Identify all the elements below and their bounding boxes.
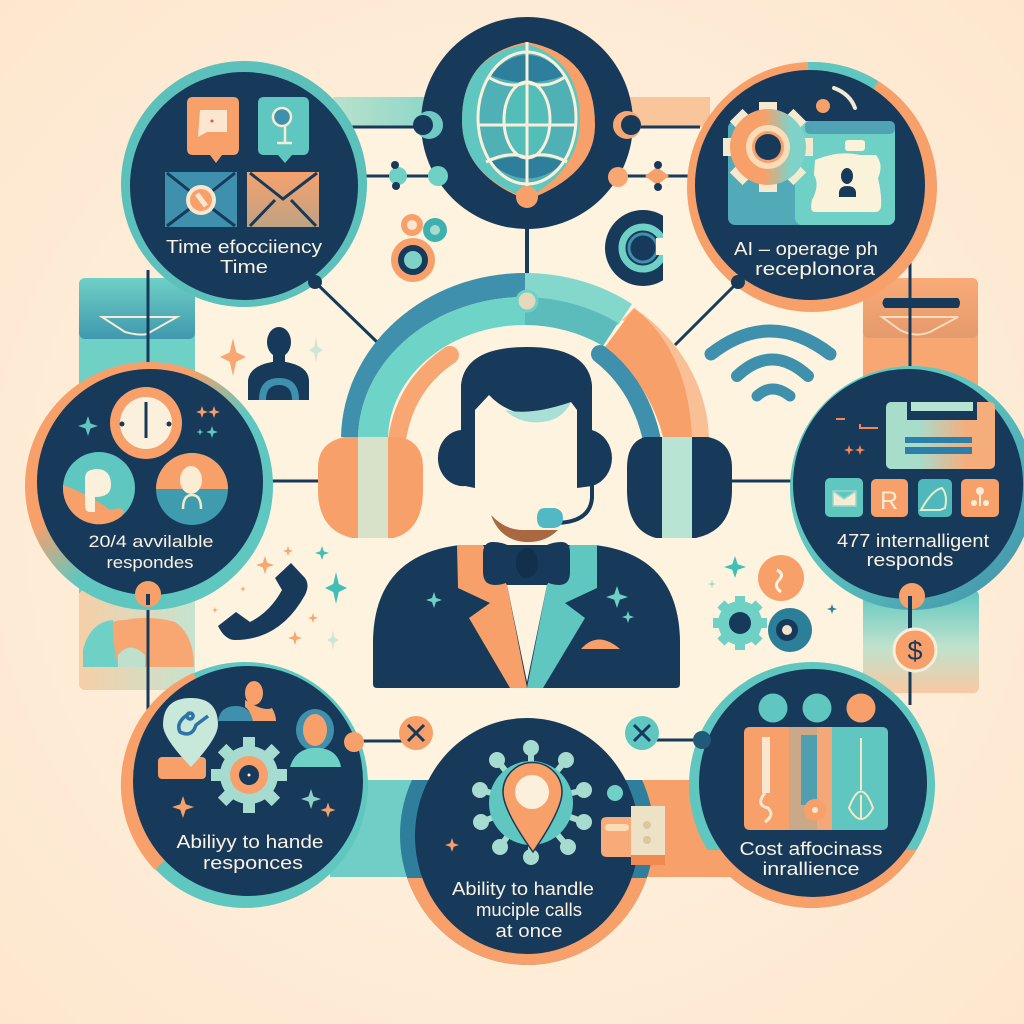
icon: hand holding card: [601, 806, 665, 865]
microphone: [537, 484, 592, 528]
label: intelligent responses: [837, 531, 989, 570]
label: multiple calls: at once: [496, 921, 562, 941]
connector node: AI circle: [731, 275, 745, 289]
label: multiple calls: Ability to handle: [452, 879, 594, 899]
icon: cross left: [399, 716, 433, 750]
icon: person silhouette: [220, 327, 323, 400]
icon: cross right: [625, 716, 659, 750]
shirt: [507, 585, 547, 682]
teal lapel: [527, 545, 597, 688]
node: [693, 731, 711, 749]
label: handle responses: responces: [203, 853, 303, 873]
icon: orange chat bubble: [187, 97, 239, 163]
label: time efficiency: [166, 237, 322, 277]
icon: gear ring with location pin: [472, 740, 623, 865]
icon: tool columns: [744, 727, 888, 830]
label: availability: respondes: [106, 553, 194, 572]
pocket: [581, 640, 620, 649]
icon: telephone: [212, 546, 347, 650]
headset band: [341, 273, 709, 440]
label: intelligent responses: responds: [866, 550, 954, 570]
icon: dollar coin: $: [907, 636, 923, 666]
connector node: right lower: [899, 583, 925, 640]
small nodes row: [389, 161, 669, 191]
icon: wifi: [711, 331, 830, 396]
panel: 24/7 intelligent responses: [790, 366, 1024, 610]
panel: time efficiency: [121, 61, 367, 307]
icon: concentric C: [605, 210, 663, 286]
connector node: time circle: [308, 275, 322, 289]
connector node: globe left: [413, 111, 443, 139]
label: multiple calls: muciple calls: [476, 900, 582, 920]
label: handle responses: Abiliyy to hande: [176, 832, 324, 852]
left ear cup: [318, 437, 423, 538]
icon: dollar coin: [894, 629, 936, 671]
jacket: [373, 545, 680, 688]
sparkles: [172, 789, 336, 818]
icon: avatar left: [63, 452, 135, 524]
label: cost effectiveness: [740, 839, 882, 879]
bow tie: [483, 542, 570, 585]
label: time efficiency: Time efocciiency: [166, 237, 322, 257]
panel: AI operated receptionist: [687, 62, 937, 312]
label: AI receptionist: receplonora: [755, 259, 876, 279]
icon: avatar right: [156, 453, 228, 525]
icons: sparkles: [836, 419, 878, 455]
receptionist figure: [373, 347, 680, 688]
connector node: bottom left: [344, 732, 364, 752]
panel: ability to handle responses: [121, 662, 368, 908]
panel: globe: [421, 17, 633, 229]
icon: small gears: [391, 214, 447, 282]
icons: app tiles: R: [880, 487, 898, 515]
panel: cost effectiveness: [689, 662, 935, 908]
icon: gear: [723, 102, 813, 192]
icon: bar on right tab: [882, 298, 960, 308]
label: AI receptionist: [734, 239, 878, 279]
icon: people dots: [758, 694, 876, 722]
connector node: left lower: [135, 581, 161, 607]
connector lines: [148, 127, 910, 741]
icon: teal envelope: [165, 172, 237, 227]
smile: [491, 515, 558, 542]
hair accent: [505, 402, 571, 422]
icon: globe: [462, 42, 595, 208]
icon: id window: [728, 121, 895, 225]
icon: keyboard: [886, 402, 995, 469]
icon: teal chat bubble: [258, 97, 309, 163]
label: availability: [88, 532, 214, 572]
label: handle responses: [176, 832, 324, 873]
label: AI receptionist: AI – operage ph: [734, 239, 878, 259]
background panel: central backdrop: [79, 97, 979, 877]
label: multiple calls: [452, 879, 594, 941]
icon: clock: [110, 387, 182, 459]
label: cost effectiveness: inrallience: [762, 859, 860, 879]
icon: people group: [158, 681, 341, 779]
orange lapel: [457, 545, 527, 688]
icon: lower gears: [708, 555, 837, 652]
icon: orange envelope: [247, 172, 319, 227]
hair and ears: [438, 347, 612, 488]
panel: 24/7 availability: [25, 362, 273, 610]
panel: multiple calls: [400, 705, 665, 965]
right ear cup: [627, 437, 732, 538]
label: intelligent responses: 477 internalligent: [837, 531, 989, 551]
label: availability: 20/4 avvilalble: [88, 532, 214, 551]
icons: app tiles: [825, 478, 999, 517]
label: cost effectiveness: Cost affocinass: [740, 839, 882, 859]
icon: center gear: [211, 737, 287, 813]
label: time efficiency: Time: [220, 257, 268, 277]
connector node: globe right: [613, 111, 641, 139]
icons: sparkles: [78, 406, 220, 438]
